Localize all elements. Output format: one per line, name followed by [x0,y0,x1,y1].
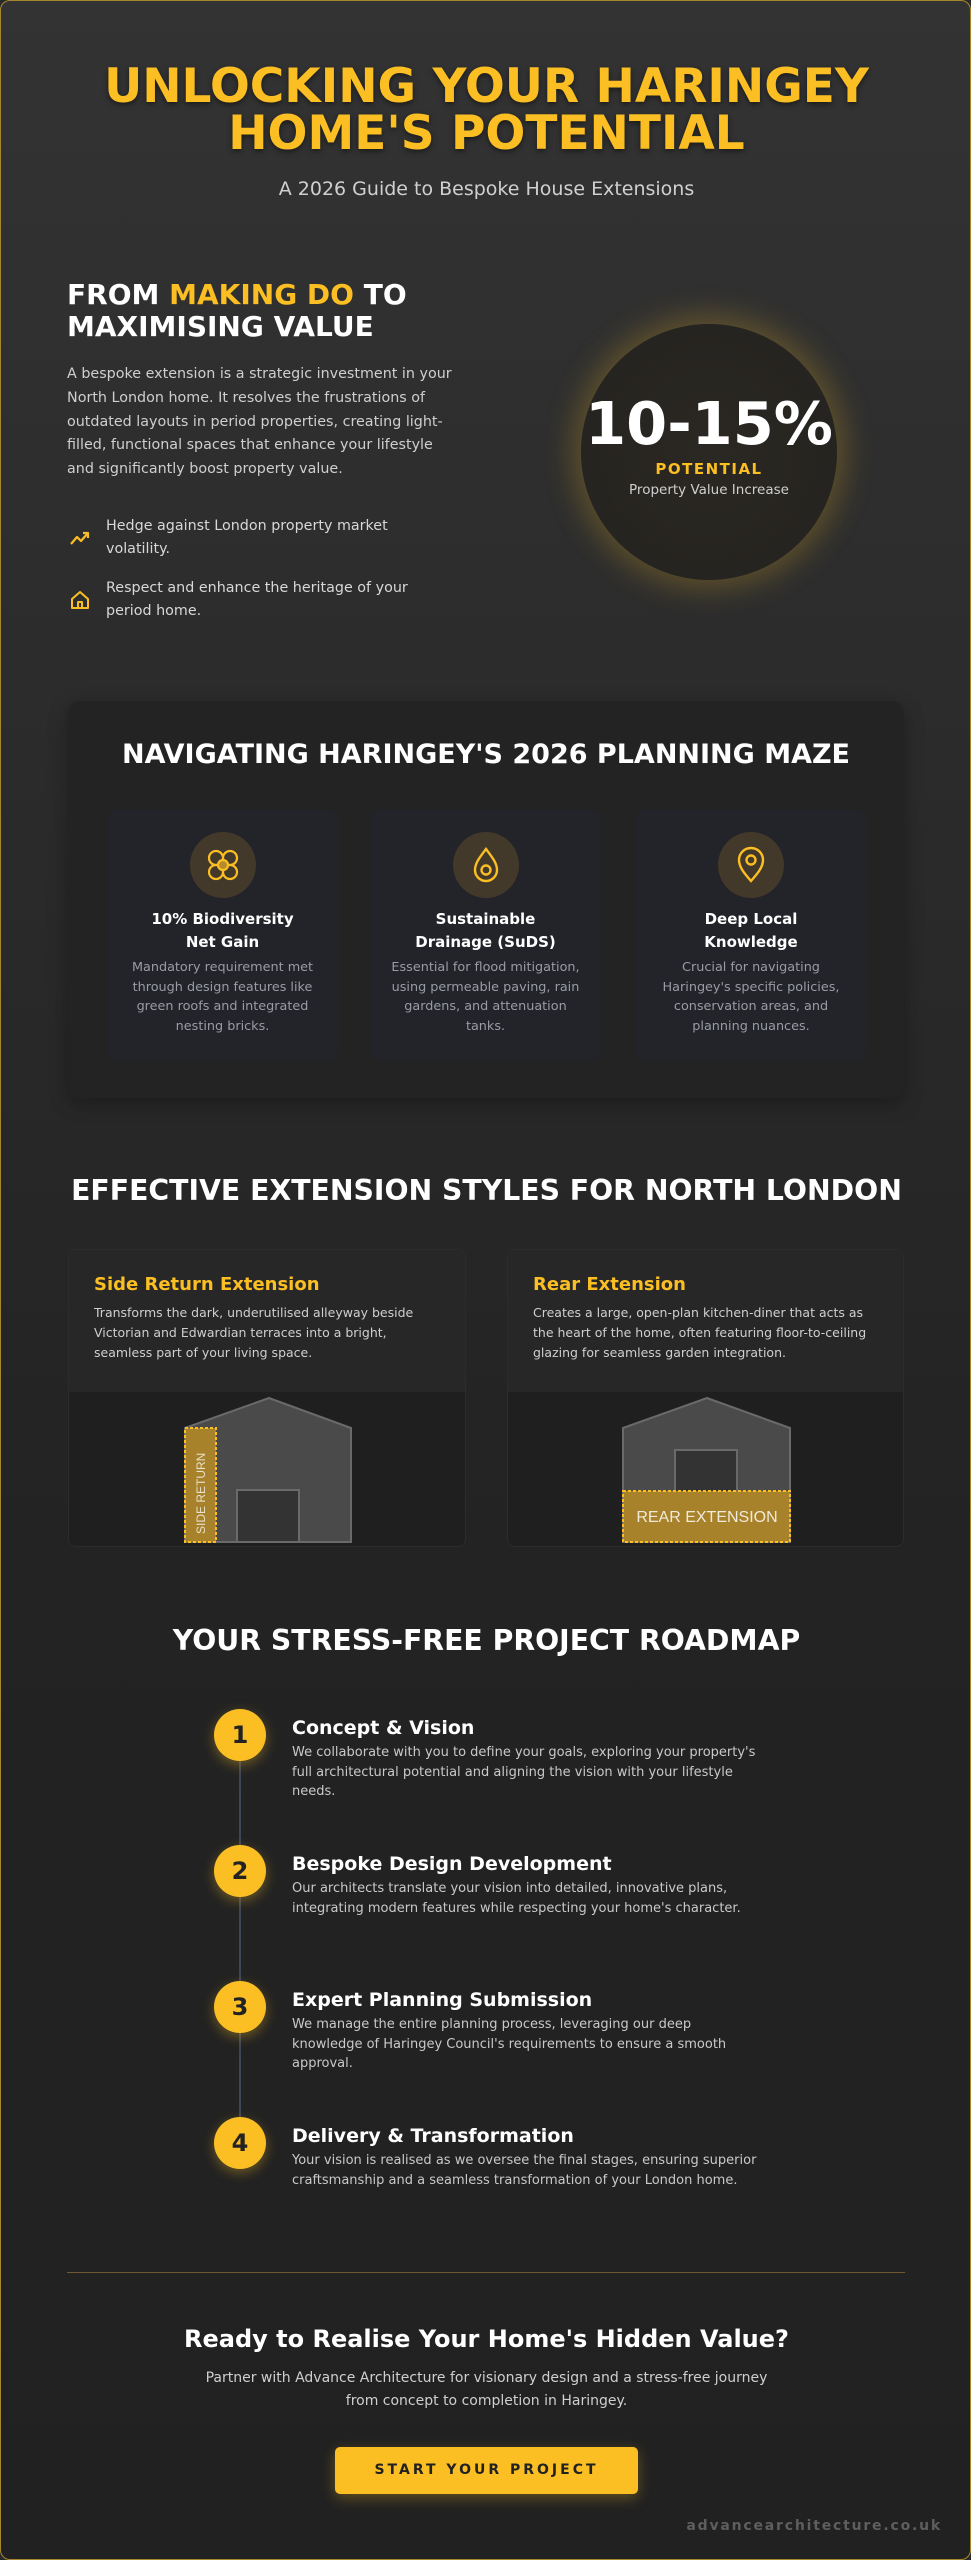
step 1: 1 [232,1721,248,1749]
title: UNLOCKING YOUR HARINGEY [104,59,869,114]
roadmap timeline [239,1761,241,2117]
step 2: Bespoke Design Development [292,1853,612,1875]
step 4: Your vision is realised as we oversee the final stages, ensuring superior craftsmanship and a seamless transformation of your London home. [292,2153,756,2188]
step 1: Concept & Vision [292,1717,474,1739]
CTA heading: Ready to Realise Your Home's Hidden Value? [184,2325,789,2353]
icon: map pin [718,832,784,898]
stat circle: POTENTIAL [655,460,763,478]
step 4 [208,2114,756,2188]
step 3: 3 [232,1993,248,2021]
card: knowledge: Knowledge [704,933,798,951]
panel: planning [68,701,904,1098]
heading: MAXIMISING VALUE [67,310,374,343]
CTA button [335,2447,638,2494]
step 1 [208,1706,755,1799]
diagram: side return house: SIDE RETURN [194,1453,208,1534]
card: drainage [371,810,600,1060]
heading: NAVIGATING HARINGEY'S 2026 PLANNING MAZE [122,739,850,770]
subtitle: A 2026 Guide to Bespoke House Extensions [279,178,694,200]
step 4: Delivery & Transformation [292,2125,574,2147]
step 4: 4 [232,2129,248,2157]
diagram: side return house [184,1397,352,1543]
CTA text: Partner with Advance Architecture for visionary design and a stress-free journey from concept to completion in Haringey. [206,2370,767,2409]
step 2: Our architects translate your vision into detailed, innovative plans, integrating modern features while respecting your home's character. [292,1881,741,1916]
paragraph: A bespoke extension is a strategic investment in your North London home. It resolves the frustrations of outdated layouts in period properties, creating light-filled, functional spaces that enhance your lifestyle and significantly boost property value. [67,366,452,477]
step 1: We collaborate with you to define your goals, exploring your property's full architectural potential and aligning the vision with your lifestyle needs. [292,1745,755,1799]
diagram: rear house: REAR EXTENSION [636,1509,778,1526]
card: drainage: Essential for flood mitigation, using permeable paving, rain gardens, and attenuation tanks. [391,960,580,1034]
card: knowledge: Crucial for navigating Haringey's specific policies, conservation areas, and planning nuances. [663,960,839,1034]
heading: FROM MAKING DO TO [67,278,407,311]
heading: roadmap: YOUR STRESS-FREE PROJECT ROADMAP [173,1624,800,1657]
card: rear: Creates a large, open-plan kitchen-diner that acts as the heart of the home, often featuring floor-to-ceiling glazing for seamless garden integration. [533,1305,866,1360]
stat circle: Property Value Increase [629,482,789,498]
title: HOME'S POTENTIAL [228,106,745,161]
step 2 [208,1842,741,1916]
bullet: market: Hedge against London property market volatility. [106,518,388,557]
card: drainage: Drainage (SuDS) [415,933,556,951]
title [104,59,870,161]
section: value intro [67,278,452,619]
bullet: heritage: Respect and enhance the heritage of your period home. [106,580,408,619]
card: biodiversity: Net Gain [186,933,259,951]
card: rear: Rear Extension [533,1274,686,1295]
card: side return: Transforms the dark, underutilised alleyway beside Victorian and Edwardian terraces into a bright, seamless part of your living space. [94,1305,413,1360]
footer: advancearchitecture.co.uk [686,2518,942,2534]
card: knowledge [636,810,866,1060]
heading [67,278,407,343]
stat circle: 10-15% [585,389,833,458]
card: biodiversity: 10% Biodiversity [151,910,294,928]
step 2: 2 [232,1857,248,1885]
step 3: Expert Planning Submission [292,1989,592,2011]
step 3 [208,1978,726,2071]
stat circle [581,324,837,580]
diagram: rear house [622,1397,791,1543]
card: side return: Side Return Extension [94,1274,320,1295]
icon: house [71,591,89,609]
step 3: We manage the entire planning process, leveraging our deep knowledge of Haringey Council's requirements to ensure a smooth approval. [292,2017,726,2071]
heading: extension styles: EFFECTIVE EXTENSION STYLES FOR NORTH LONDON [71,1174,902,1207]
card: rear [507,1249,904,1547]
card: knowledge: Deep Local [705,910,797,928]
card: side return [68,1249,466,1547]
card: drainage: Sustainable [436,910,535,928]
icon: flower [190,832,256,898]
CTA button: START YOUR PROJECT [374,2462,599,2478]
icon: trend [70,532,90,545]
card: biodiversity [107,810,338,1060]
icon: drop [452,832,518,898]
card: biodiversity: Mandatory requirement met through design features like green roofs and integrated nesting bricks. [132,960,313,1034]
